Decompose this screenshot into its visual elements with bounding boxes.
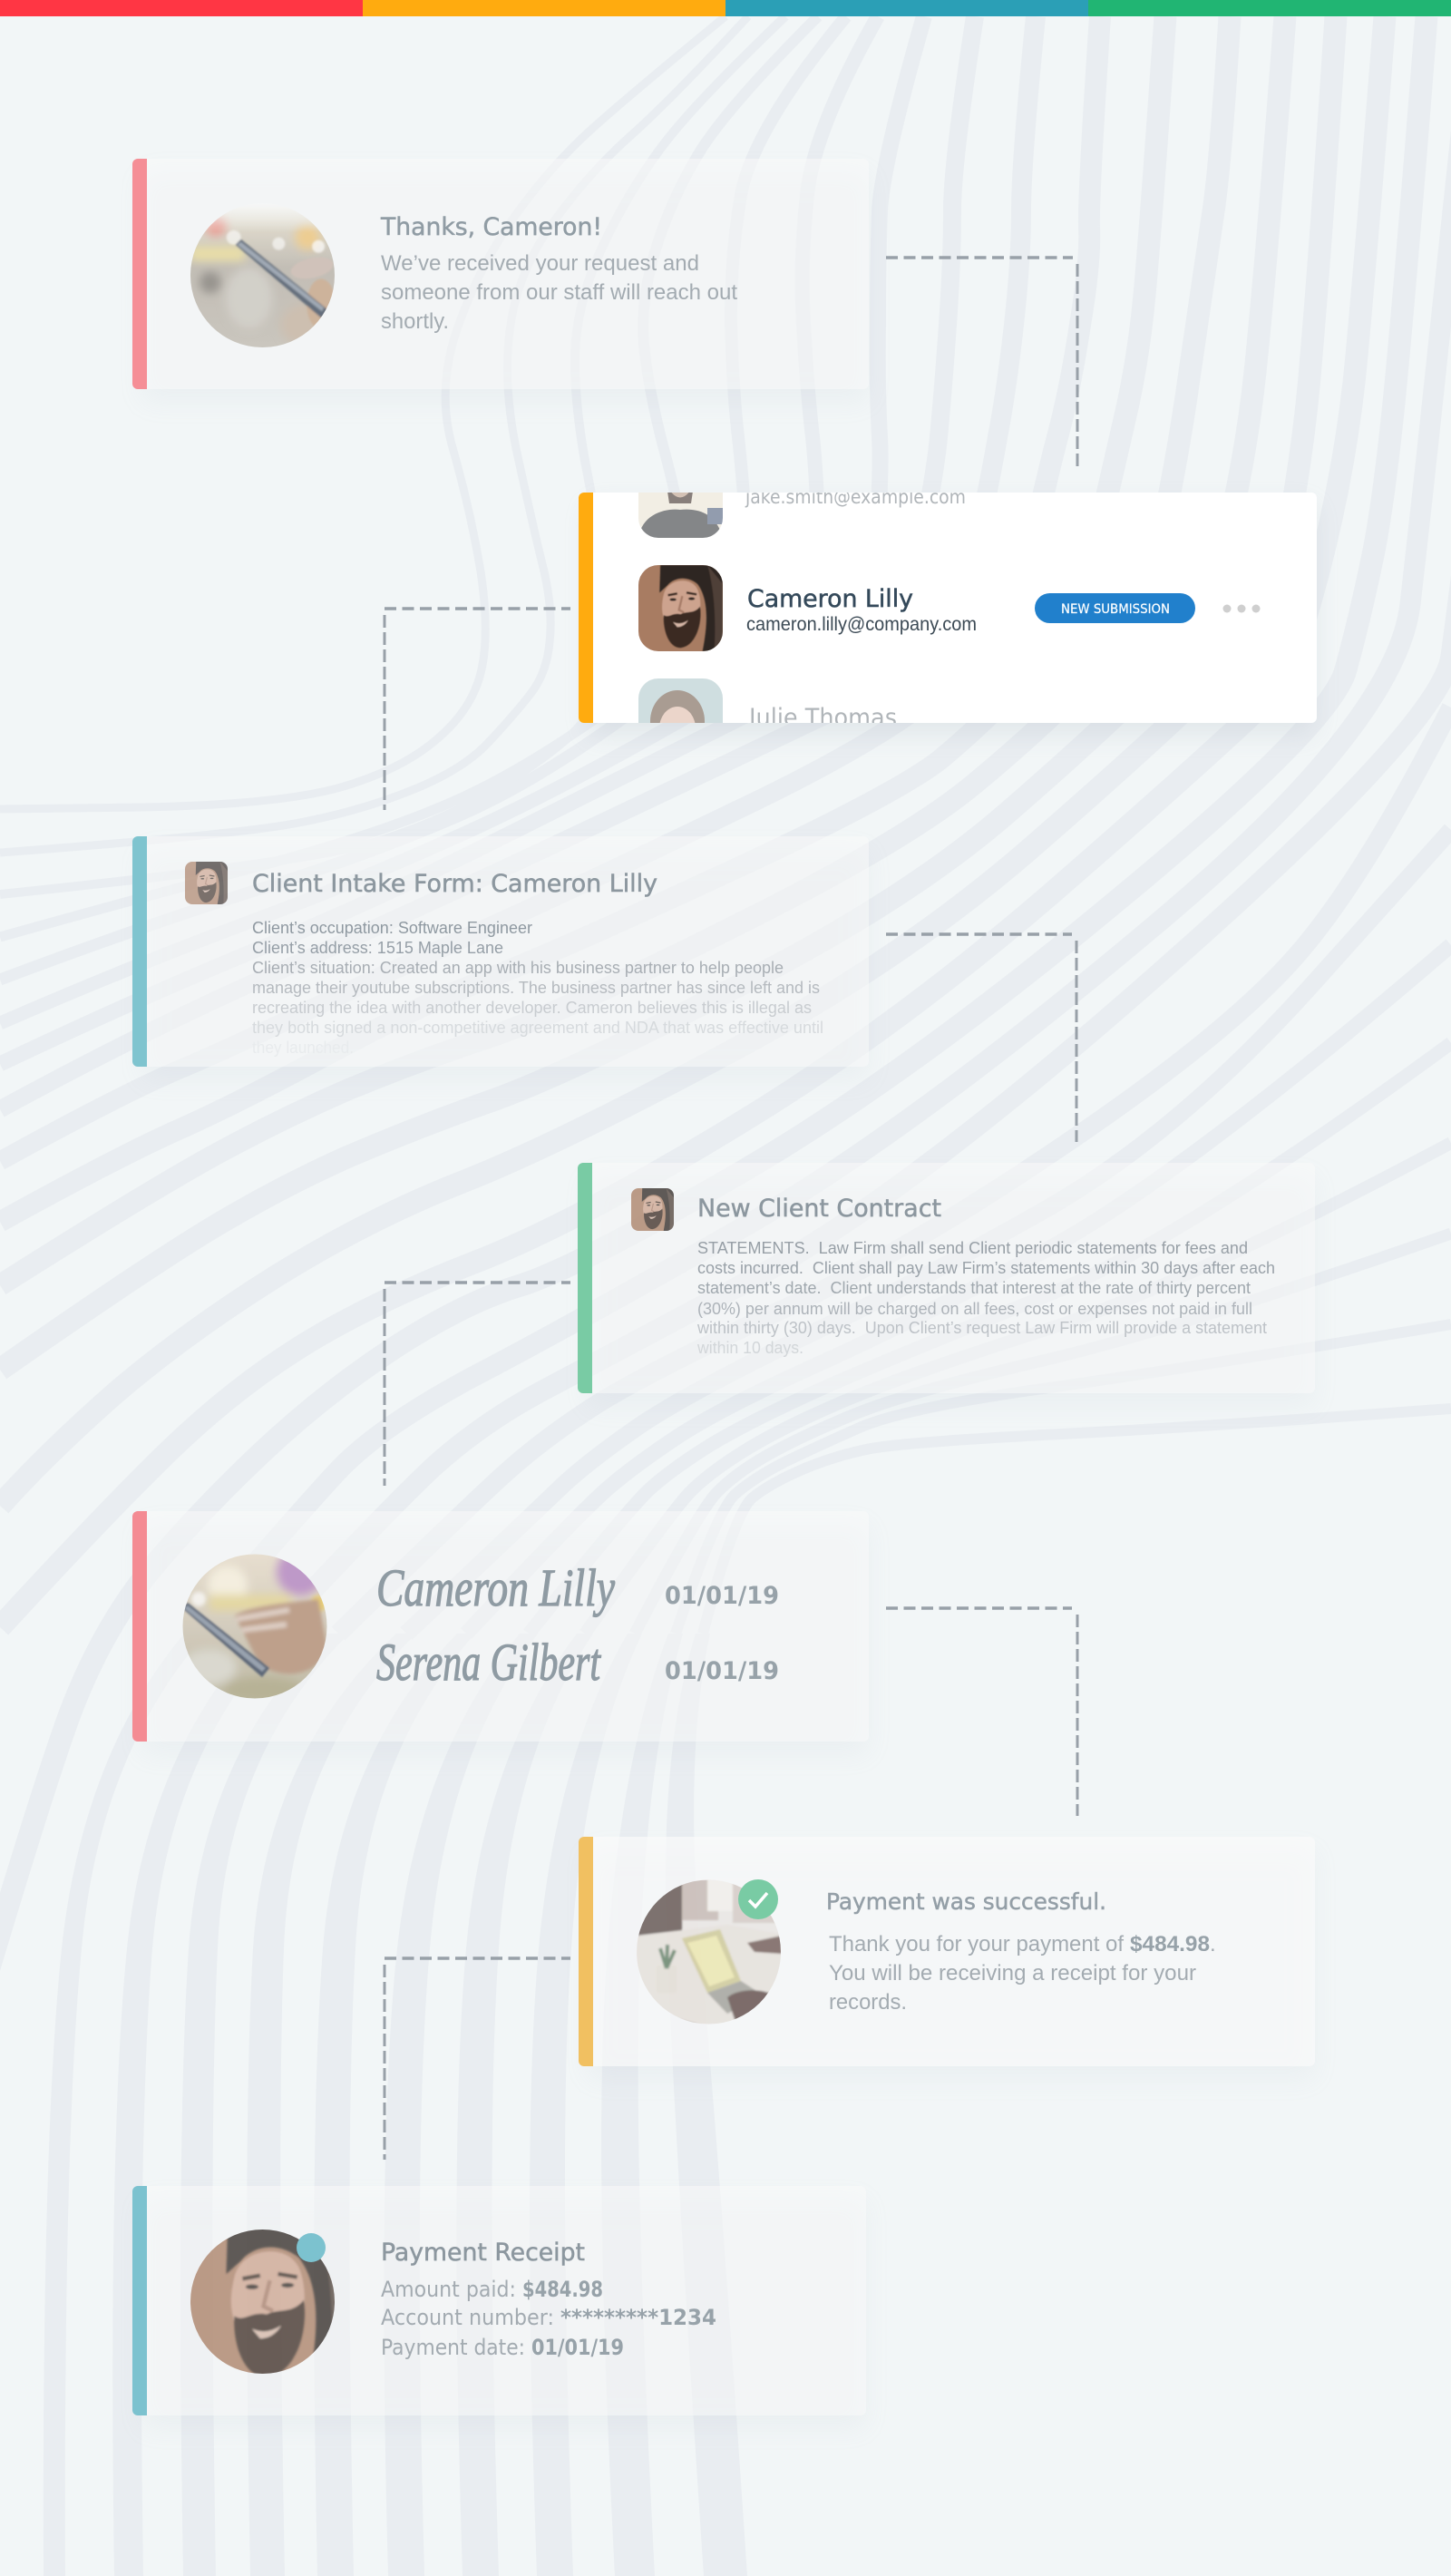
text: Jake email: jake.smith@example.com [745,486,966,508]
text: intake details: they both signed a non-competitive agreement and NDA that was effective until [252,1019,823,1037]
icon: check badge [738,1879,778,1919]
panel: payment successful card [579,1837,1213,2066]
text: contract statements: within 10 days. [696,1339,803,1357]
connector: thanks card to submissions card [886,258,1077,468]
text: intake details: manage their youtube subscriptions. The business partner has since left and is [252,979,820,997]
connector: submissions card to intake form [385,609,570,810]
avatar: client [631,1188,674,1231]
connector: payment to receipt [385,1958,570,2160]
text: payment message: Thank you for your payment of [829,1932,1124,1956]
text: Julie name: Julie Thomas [747,704,897,732]
photo: signing on phone [182,1548,327,1703]
text: contract statements: costs incurred. Client shall pay Law Firm’s statements within 30 days after each [697,1259,1275,1277]
signature: Serena: Serena Gilbert [376,1633,601,1692]
text: payment message: $484.98 [1130,1932,1210,1956]
avatar: Jake [638,493,723,538]
top colour bar [0,0,1451,16]
text: intake details: Client’s situation: Created an app with his business partner to help people [252,959,784,977]
text: payment message: You will be receiving a receipt for your [829,1961,1196,1986]
text: contract statements: statement’s date. Client understands that interest at the rate of thirty percent [697,1279,1251,1297]
heading: thanks: Thanks, Cameron! [380,213,602,241]
badge: new submission: NEW SUBMISSION [1061,602,1170,617]
panel: new client contract card [578,1163,1315,1407]
signature: Cameron: Cameron Lilly [376,1558,615,1617]
date: Cameron: 01/01/19 [665,1582,779,1610]
avatar: Julie [638,678,723,723]
text: contract statements [696,1239,1275,1357]
photo: client portrait [190,2230,335,2374]
connector: contract to signatures [385,1283,570,1486]
heading: payment receipt: Payment Receipt [381,2239,585,2267]
text: request received [381,251,737,334]
text: contract statements: STATEMENTS. Law Firm shall send Client periodic statements for fees and [697,1239,1248,1257]
connector: intake form to contract [886,934,1076,1142]
panel: submissions list card [579,493,1317,736]
photo: laptop on desk [637,1879,782,2025]
text: intake details: recreating the idea with another developer. Cameron believes this is illegal as [252,999,812,1017]
icon: more dots [1222,604,1261,613]
text: payment message [829,1932,1216,2015]
text: receipt details: 01/01/19 [531,2335,624,2360]
panel: client intake form card [132,836,869,1080]
heading: payment successful: Payment was successful. [826,1888,1106,1915]
avatar: client [185,862,228,904]
text: request received: We’ve received your request and [381,251,699,276]
text: contract statements: (30%) per annum will be charged on all fees, cost or expenses not paid in full [697,1300,1252,1318]
text: request received: someone from our staff will reach out [381,280,737,305]
text: payment message: records. [829,1990,907,2015]
heading: intake form: Client Intake Form: Cameron Lilly [252,870,657,898]
date: Serena: 01/01/19 [665,1657,779,1685]
text: intake details: they launched. [252,1039,354,1057]
photo: hand holding phone [190,203,336,347]
text: request received: shortly. [381,309,449,334]
text: receipt details: Account number: [381,2305,554,2330]
text: Cameron email: cameron.lilly@company.com [746,614,977,635]
text: intake details: Client’s occupation: Software Engineer [252,919,532,937]
connector: signatures to payment [886,1608,1077,1816]
panel: signatures card [132,1511,778,1742]
text: receipt details: *********1234 [560,2305,716,2330]
text: intake details: Client’s address: 1515 Maple Lane [252,939,503,957]
text: intake details [252,919,823,1057]
text: payment message: . [1210,1932,1216,1956]
icon: status dot [297,2233,326,2262]
text: receipt details: Amount paid: [381,2277,516,2302]
heading: contract: New Client Contract [697,1195,941,1223]
text: Cameron name: Cameron Lilly [747,585,913,613]
text: receipt details [381,2277,716,2360]
text: contract statements: within thirty (30) days. Upon Client’s request Law Firm will provide a statement [696,1319,1267,1337]
text: receipt details: Payment date: [381,2335,525,2360]
badge: new submission [1035,593,1195,623]
panel: thanks card [132,159,822,389]
panel: payment receipt card [132,2186,720,2415]
text: receipt details: $484.98 [522,2277,603,2302]
avatar: Cameron [638,565,723,651]
